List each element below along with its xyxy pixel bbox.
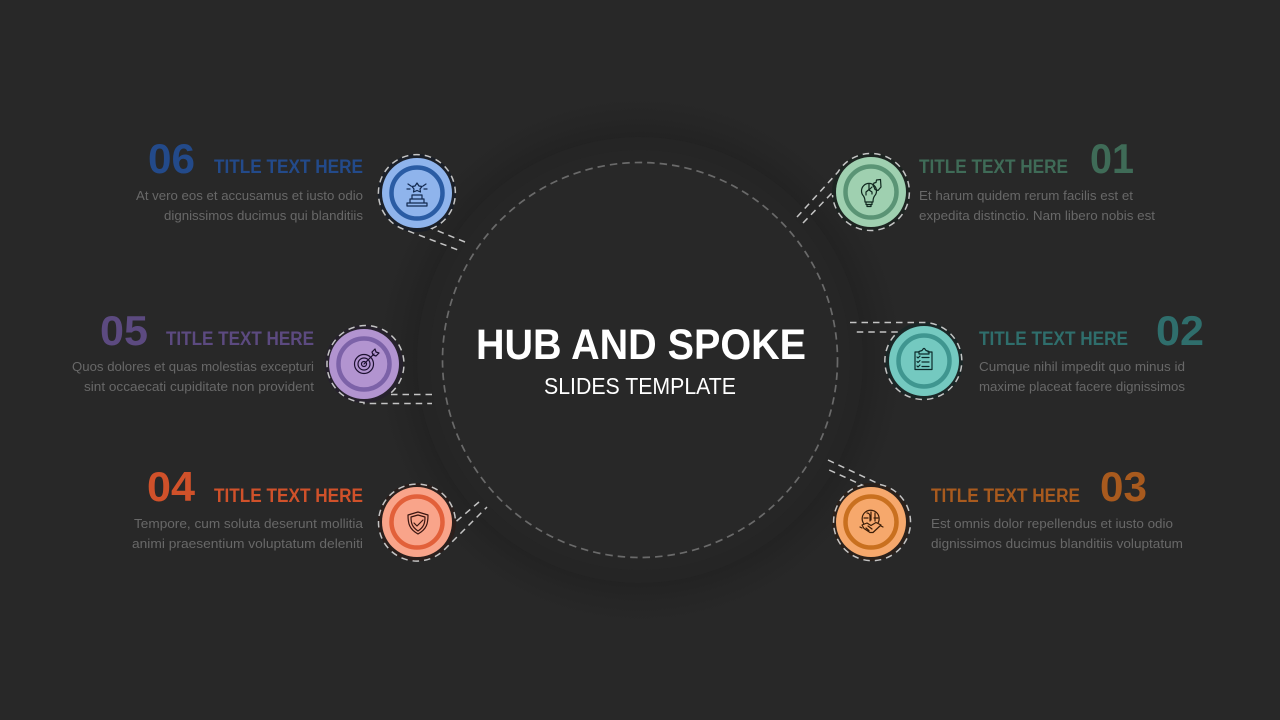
icon: clipboard: [915, 348, 932, 370]
description 03: [931, 516, 1183, 551]
icon: handshake gear: [860, 510, 883, 532]
description 01: Et harum quidem rerum facilis est et: [919, 188, 1133, 203]
description 04: animi praesentium voluptatum deleniti: [132, 536, 363, 551]
title 05: TITLE TEXT HERE: [166, 329, 314, 350]
number 06: 06: [148, 135, 195, 182]
icon: target: [354, 349, 379, 374]
description 06: dignissimos ducimus qui blanditiis: [164, 208, 364, 223]
title 03: TITLE TEXT HERE: [931, 486, 1080, 507]
description 06: At vero eos et accusamus et iusto odio: [136, 188, 363, 203]
description 06: [136, 188, 364, 223]
description 04: [132, 516, 364, 551]
node 04: [378, 483, 487, 561]
node 01: [797, 153, 910, 231]
node 03: [827, 460, 911, 561]
title 04: TITLE TEXT HERE: [214, 486, 363, 507]
hub subtitle: SLIDES TEMPLATE: [544, 373, 736, 399]
number 04: 04: [147, 463, 196, 510]
number 05: 05: [100, 307, 148, 354]
description 01: [919, 188, 1155, 223]
icon: shield check: [408, 512, 428, 534]
hub title: HUB AND SPOKE: [476, 321, 806, 369]
number 01: 01: [1090, 135, 1134, 182]
description 02: Cumque nihil impedit quo minus id: [979, 359, 1185, 374]
title 01: TITLE TEXT HERE: [919, 157, 1068, 178]
description 02: maxime placeat facere dignissimos: [979, 379, 1186, 394]
title 06: TITLE TEXT HERE: [214, 157, 363, 178]
description 04: Tempore, cum soluta deserunt mollitia: [134, 516, 364, 531]
description 01: expedita distinctio. Nam libero nobis est: [919, 208, 1155, 223]
icon: lightbulb puzzle: [861, 180, 881, 206]
description 03: Est omnis dolor repellendus et iusto odio: [931, 516, 1173, 531]
number 03: 03: [1100, 463, 1147, 510]
central hub: [375, 95, 905, 625]
description 05: sint occaecati cupiditate non provident: [84, 379, 314, 394]
number 02: 02: [1156, 307, 1204, 354]
node 02: [850, 322, 963, 400]
title 02: TITLE TEXT HERE: [979, 329, 1128, 350]
node 05: [325, 325, 432, 404]
description 05: Quos dolores et quas molestias excepturi: [72, 359, 314, 374]
description 03: dignissimos ducimus blanditiis voluptatum: [931, 536, 1183, 551]
node 06: [378, 154, 465, 250]
description 02: [979, 359, 1186, 394]
icon: podium star: [407, 183, 427, 206]
description 05: [72, 359, 314, 394]
